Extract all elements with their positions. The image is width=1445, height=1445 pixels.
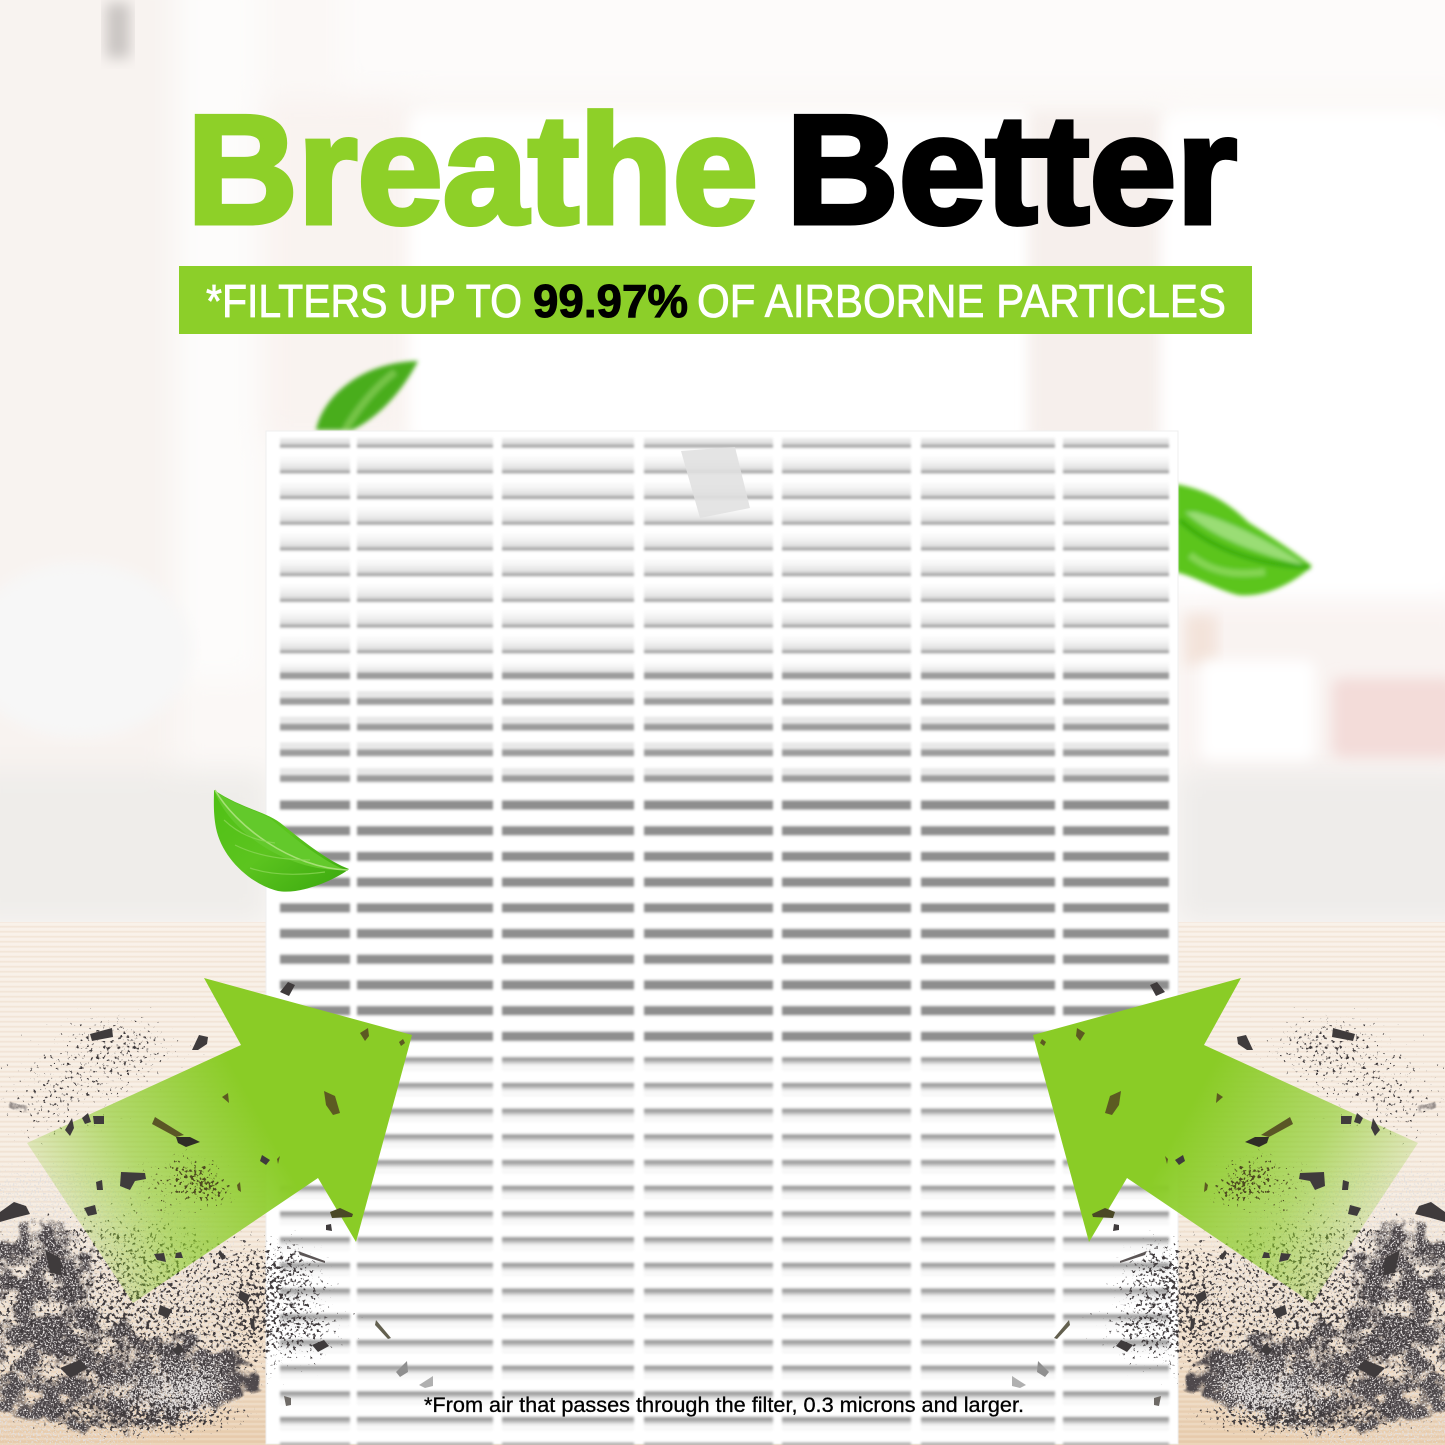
footnote: *From air that passes through the filter, 0.3 microns and larger. — [424, 1394, 1024, 1417]
leaf: top behind filter — [316, 361, 418, 430]
filter pull tab — [681, 447, 750, 518]
banner percentage: 99.97% — [533, 275, 688, 327]
HEPA air filter — [266, 431, 1180, 1445]
filter pleats — [270, 438, 1180, 1445]
leaf: right behind filter — [1176, 484, 1312, 595]
banner text start: *FILTERS UP TO — [206, 275, 522, 327]
banner text end: OF AIRBORNE PARTICLES — [697, 275, 1226, 327]
left dust and green arrow — [0, 960, 460, 1445]
filter frame — [266, 431, 1178, 1444]
leaf: left front — [214, 790, 349, 892]
title — [187, 83, 1237, 256]
wooden table surface — [0, 922, 1445, 1445]
green claim banner — [179, 266, 1252, 334]
title word: Breathe: Breathe — [187, 83, 758, 256]
title word: Better: Better — [786, 83, 1237, 256]
right dust and green arrow — [985, 960, 1445, 1445]
